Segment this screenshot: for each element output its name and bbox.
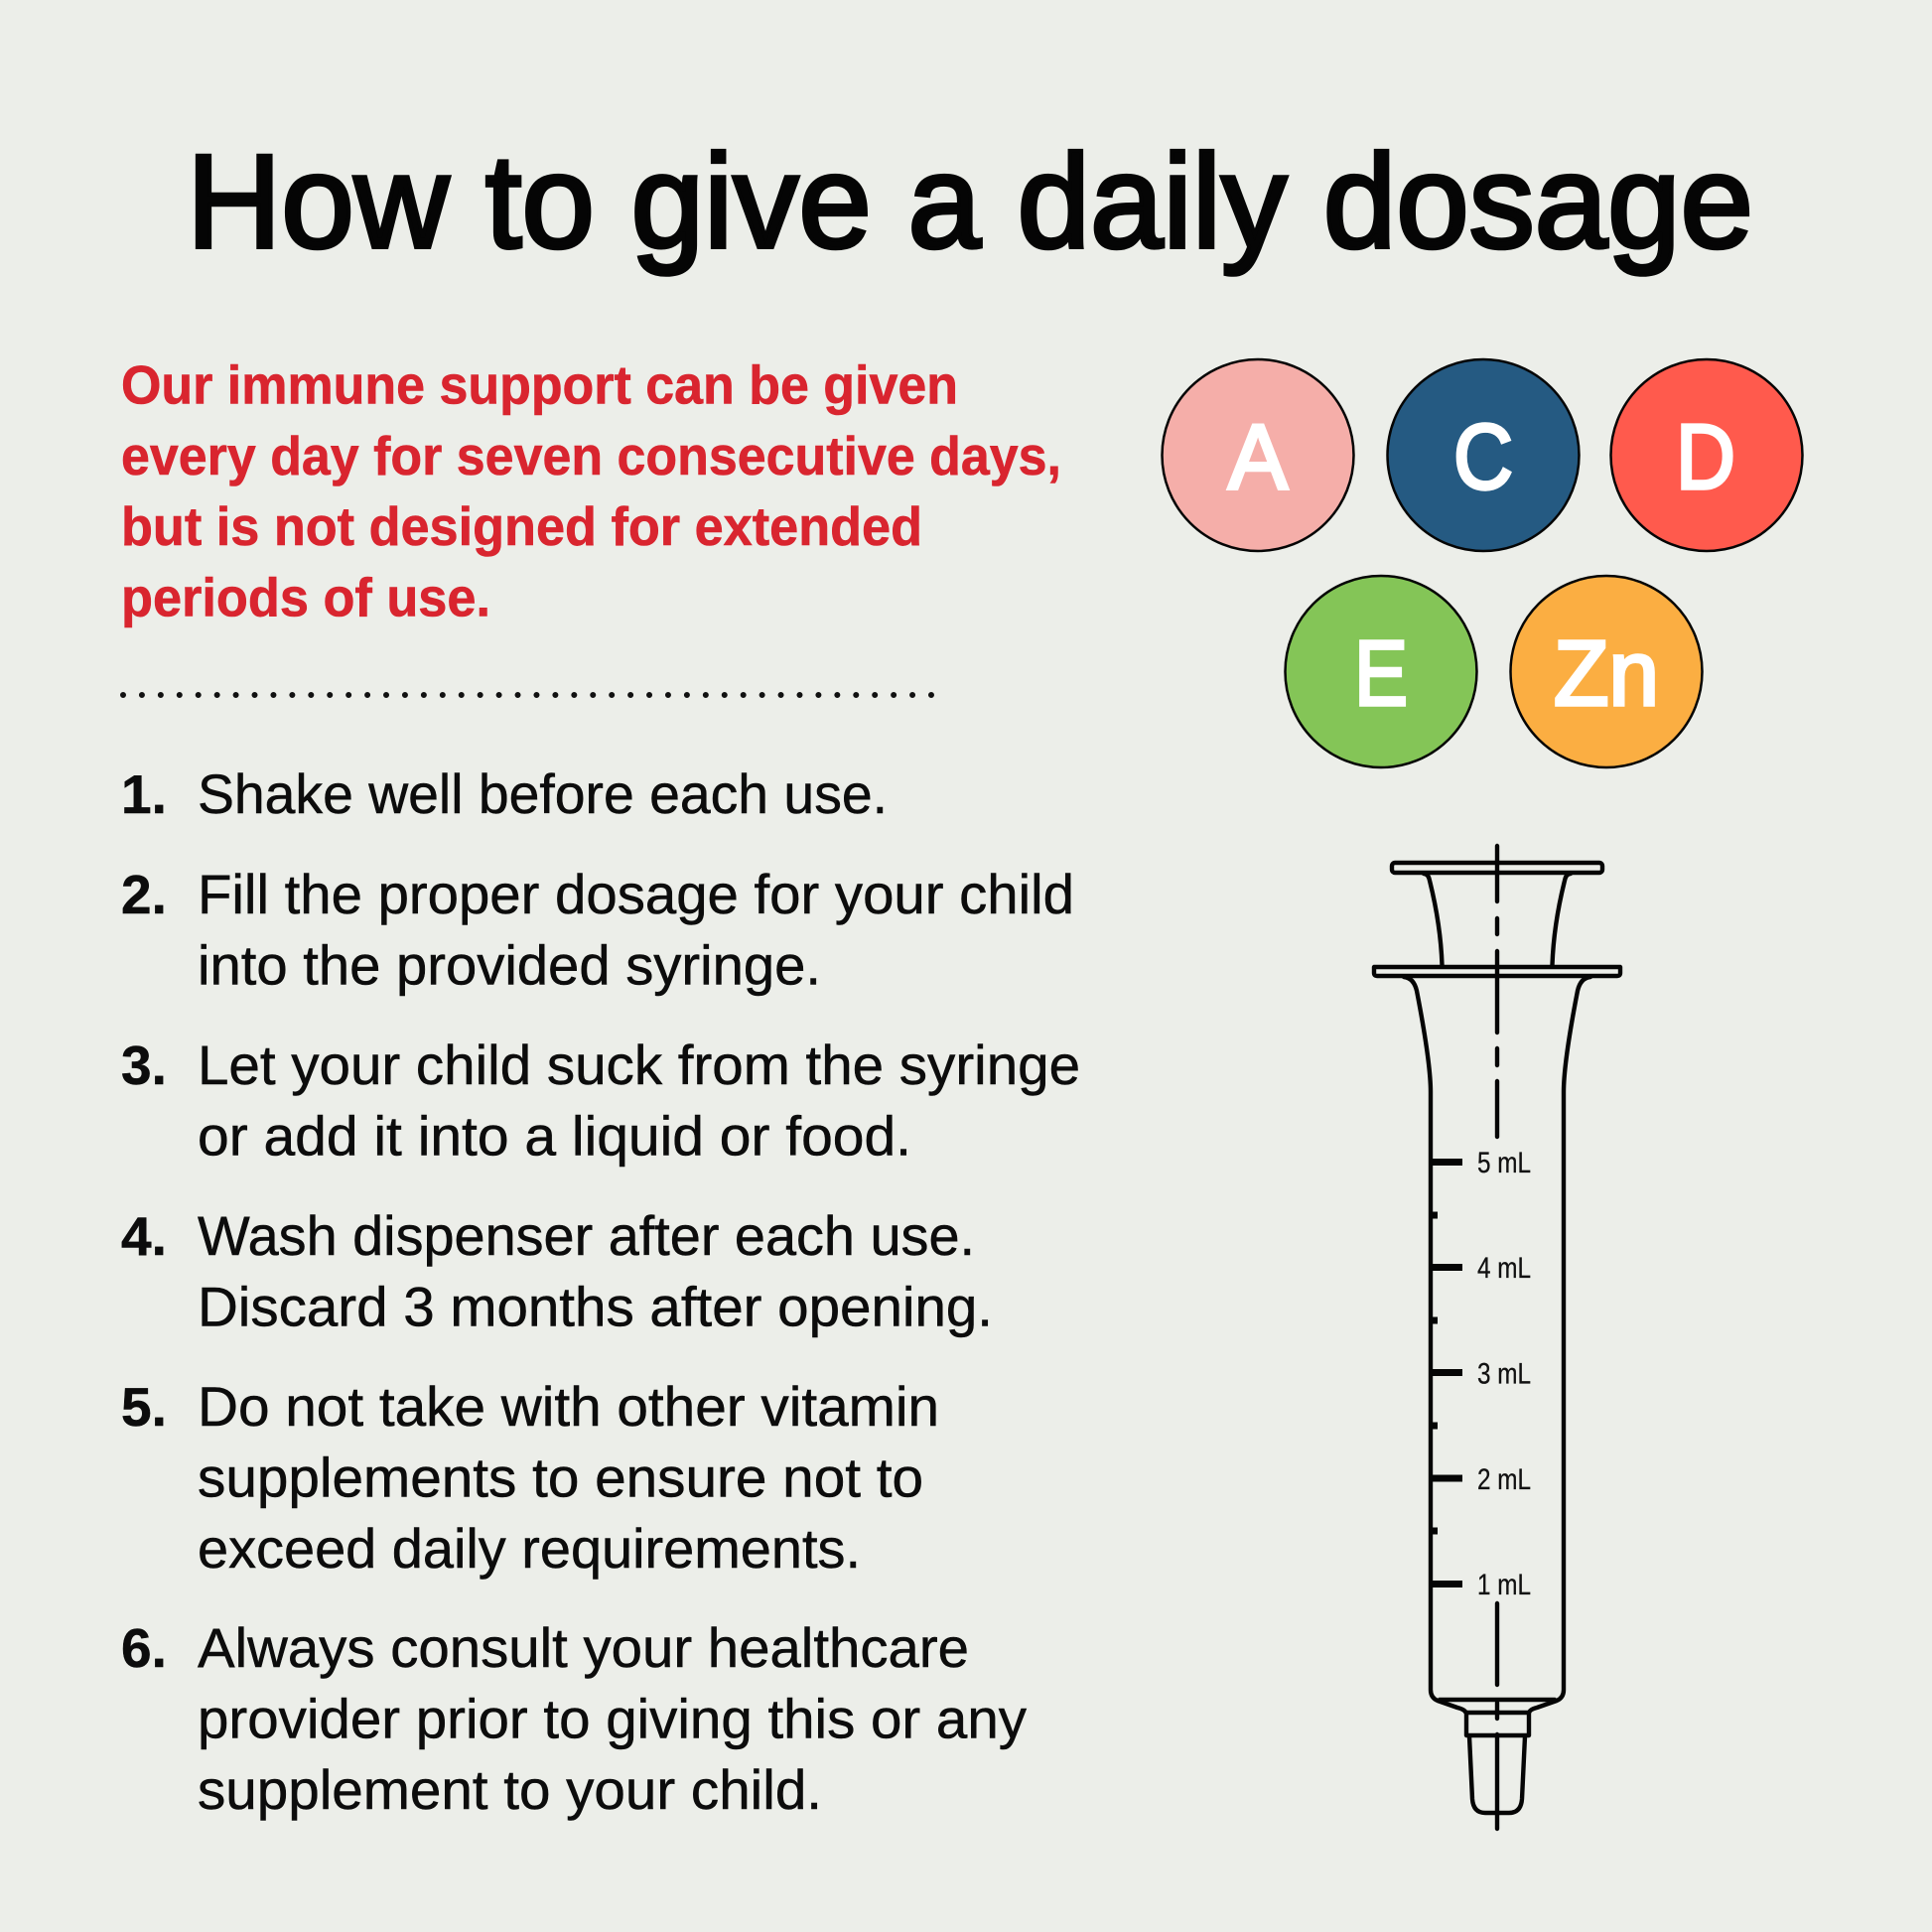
red intro text: periods of use.: [121, 566, 490, 627]
syringe tick marks: [1431, 1159, 1462, 1587]
step 2: [121, 863, 1074, 997]
step 6: provider prior to giving this or any: [198, 1688, 1027, 1749]
step 5: 5.: [121, 1376, 167, 1438]
circle: vitamin A: [1162, 359, 1354, 551]
numbered instructions list: [121, 762, 1080, 1821]
circle: vitamin D: D: [1676, 405, 1735, 508]
step 1: 1.: [121, 763, 167, 825]
nutrient circles: [1162, 359, 1803, 767]
step 6: supplement to your child.: [198, 1758, 822, 1821]
circle: vitamin C: C: [1453, 405, 1513, 508]
step 6: [121, 1616, 1027, 1821]
syringe illustration: [1374, 846, 1620, 1829]
syringe volume labels: 2 mL: [1477, 1463, 1531, 1496]
circle: vitamin D: [1610, 359, 1803, 551]
syringe volume labels: 4 mL: [1477, 1252, 1531, 1285]
red intro text: but is not designed for extended: [121, 495, 922, 557]
step 3: or add it into a liquid or food.: [198, 1104, 911, 1168]
step 6: Always consult your healthcare: [198, 1616, 969, 1679]
syringe volume labels: 3 mL: [1477, 1358, 1531, 1390]
step 4: Wash dispenser after each use.: [198, 1204, 975, 1267]
red intro text: every day for seven consecutive days,: [121, 425, 1061, 486]
step 1: Shake well before each use.: [198, 762, 888, 825]
step 4: Discard 3 months after opening.: [198, 1275, 993, 1338]
title: How to give a daily dosage: [187, 128, 1753, 276]
circle: vitamin C: [1388, 359, 1579, 551]
syringe centre line: [1495, 846, 1499, 1829]
syringe volume labels: 5 mL: [1477, 1147, 1531, 1179]
step 2: Fill the proper dosage for your child: [198, 863, 1074, 925]
circle: zinc: Zn: [1554, 621, 1659, 725]
circle: vitamin A: A: [1228, 405, 1288, 508]
syringe volume labels: [1477, 1147, 1531, 1601]
step 5: supplements to ensure not to: [198, 1446, 923, 1509]
step 5: [121, 1375, 939, 1580]
step 4: [121, 1204, 993, 1338]
circle: zinc: [1511, 576, 1702, 767]
step 4: 4.: [121, 1205, 167, 1267]
syringe volume labels: 1 mL: [1477, 1569, 1531, 1601]
step 2: into the provided syringe.: [198, 933, 821, 997]
step 2: 2.: [121, 864, 167, 925]
step 3: Let your child suck from the syringe: [198, 1034, 1080, 1096]
step 5: exceed daily requirements.: [198, 1517, 861, 1580]
step 3: [121, 1034, 1080, 1168]
red intro text: [121, 353, 1061, 627]
syringe outline: [1374, 863, 1620, 1813]
circle: vitamin E: E: [1354, 621, 1408, 725]
step 6: 6.: [121, 1617, 167, 1679]
step 3: 3.: [121, 1035, 167, 1096]
step 5: Do not take with other vitamin: [198, 1375, 939, 1438]
circle: vitamin E: [1285, 576, 1477, 767]
red intro text: Our immune support can be given: [121, 353, 958, 415]
